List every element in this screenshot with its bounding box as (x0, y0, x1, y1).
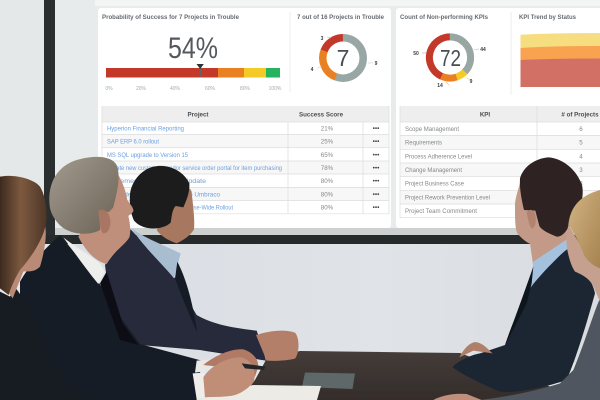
heading: KPI trend: KPI Trend by Status (519, 14, 576, 21)
tablet on table (302, 372, 355, 389)
big metric: 54%: 54% (168, 32, 218, 65)
hand (459, 342, 493, 357)
donut chart: projects in trouble: 4 (311, 67, 314, 73)
table: projects: ••• (373, 152, 380, 159)
table: projects: 80% (321, 192, 334, 198)
table: KPIs: 3 (579, 181, 583, 188)
donut chart: projects in trouble: 3 (321, 36, 324, 42)
table: projects: MS SQL upgrade to Version 15 (107, 152, 188, 159)
table: KPIs: Project Rework Prevention Level (405, 194, 490, 202)
table: projects: ••• (373, 204, 380, 212)
table: projects (102, 106, 389, 214)
heading: non-performing KPIs: Count of Non-performing KPIs (400, 14, 488, 21)
heading: projects in trouble: 7 out of 16 Projects in Trouble (297, 14, 384, 21)
donut chart: non-performing KPIs: 44 (480, 47, 486, 53)
table: KPIs: Scope Management (405, 126, 459, 133)
table: KPIs: Requirements (405, 140, 442, 146)
donut chart: non-performing KPIs: 72 (440, 45, 461, 71)
person: grey-haired man, centre left (20, 157, 266, 400)
table: projects: Create new customer/vendor service order portal for item purchasing (107, 165, 282, 172)
donut chart: non-performing KPIs (413, 28, 486, 89)
table: projects: ••• (373, 126, 380, 133)
monitor screen (55, 0, 600, 235)
table: KPIs: 5 (579, 140, 583, 146)
hands (203, 349, 258, 377)
table: projects: 80% (321, 178, 334, 185)
table: KPIs: # of Projects (561, 111, 599, 118)
heading: probability of success: Probability of Success for 7 Projects in Trouble (102, 14, 239, 21)
table: projects: Upgrade Corporate Website to Umbraco (107, 192, 220, 198)
cuffs (195, 359, 210, 373)
table: projects: 80% (321, 205, 334, 212)
hand (256, 331, 299, 361)
person: woman, far left (0, 176, 100, 400)
gauge axis labels: 80% (240, 86, 251, 92)
person: blonde woman, far right (433, 190, 600, 400)
table: projects: ••• (373, 192, 380, 198)
table: KPIs (400, 106, 600, 218)
table: projects: 78% (321, 165, 334, 172)
table: projects: SAP ERP 6.0 rollout (107, 138, 159, 146)
hand (433, 394, 482, 400)
table: KPIs: KPI (480, 111, 490, 118)
table: projects: Project (188, 111, 208, 118)
gauge axis labels: 60% (205, 86, 216, 92)
table: projects: ••• (373, 139, 380, 146)
table: KPIs: Change Management (405, 167, 462, 174)
area chart: KPI trend by status (520, 33, 600, 87)
conference table (200, 351, 600, 400)
donut chart: projects in trouble: 9 (375, 61, 378, 67)
table: KPIs: Process Adherence Level (405, 154, 472, 160)
donut chart: non-performing KPIs: 9 (470, 79, 473, 85)
gauge axis labels: 40% (170, 86, 181, 92)
paper on table (200, 385, 321, 400)
donut chart: projects in trouble: 7 (337, 45, 349, 71)
table: projects: ••• (373, 178, 380, 185)
gauge bar (106, 64, 280, 78)
table: projects: Implement Site Security Update (107, 178, 206, 185)
person: dark-haired man, right (453, 157, 595, 392)
table: projects: 21% (321, 126, 334, 132)
table: projects: ••• (373, 165, 380, 172)
table: projects: Success Score (299, 111, 344, 118)
person: dark-haired man, centre (105, 166, 299, 361)
gauge axis labels: 20% (136, 86, 147, 92)
table: KPIs: 6 (579, 126, 583, 133)
table: KPIs: Project Business Case (405, 181, 465, 188)
table: KPIs: Project Team Commitment (405, 208, 477, 215)
monitor frame (44, 0, 600, 244)
gauge axis labels: 0% (105, 86, 113, 92)
table: projects: Deploy Collaboration Suite Enterprise-Wide Rollout (107, 205, 233, 212)
table: KPIs: 3 (579, 167, 583, 174)
gauge axis labels: 100% (269, 86, 282, 92)
table: projects: 65% (321, 152, 334, 159)
table: projects: 25% (321, 138, 334, 146)
gauge axis labels (105, 86, 282, 92)
panel: project success dashboard (98, 8, 391, 228)
donut chart: projects in trouble (311, 32, 378, 84)
donut chart: non-performing KPIs: 50 (413, 51, 419, 57)
donut chart: non-performing KPIs: 14 (437, 83, 443, 89)
panel: KPI dashboard (396, 8, 600, 228)
table: projects: Hyperion Financial Reporting (107, 126, 184, 132)
table: KPIs: 4 (579, 154, 583, 160)
